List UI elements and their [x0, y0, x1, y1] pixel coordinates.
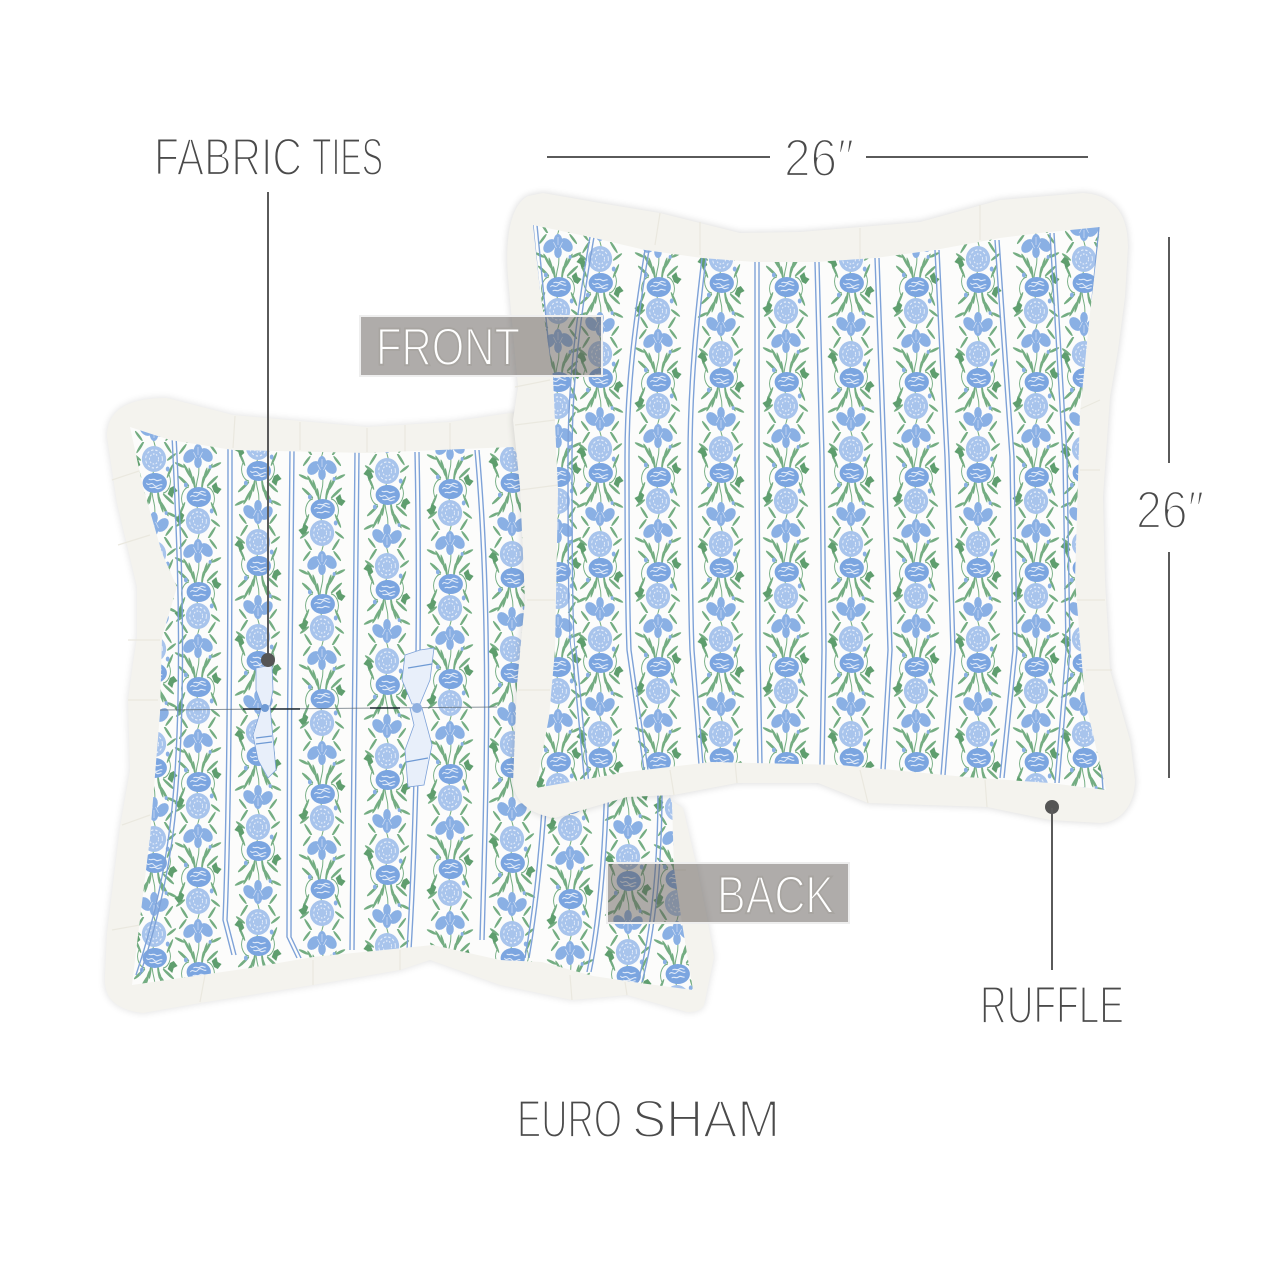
caption: euro sham: EURO	[517, 1090, 622, 1149]
callout: fabric ties	[154, 128, 383, 667]
label: back: BACK	[717, 866, 834, 925]
dimension: width 26 inches: 26″	[784, 129, 854, 188]
fabric ties	[253, 648, 434, 787]
label: back	[607, 863, 849, 925]
callout: ruffle	[980, 800, 1124, 1035]
dimension: height 26 inches: 26″	[1136, 481, 1204, 540]
callout: ruffle: RUFFLE	[980, 976, 1124, 1035]
pillow: back of sham	[102, 396, 716, 1015]
label: front: FRONT	[376, 318, 520, 377]
pillow: front of sham	[504, 190, 1138, 826]
caption: euro sham: SHAM	[632, 1090, 780, 1149]
seam	[160, 707, 497, 710]
callout: fabric ties: TIES	[312, 128, 383, 187]
callout: fabric ties: FABRIC	[154, 128, 302, 187]
